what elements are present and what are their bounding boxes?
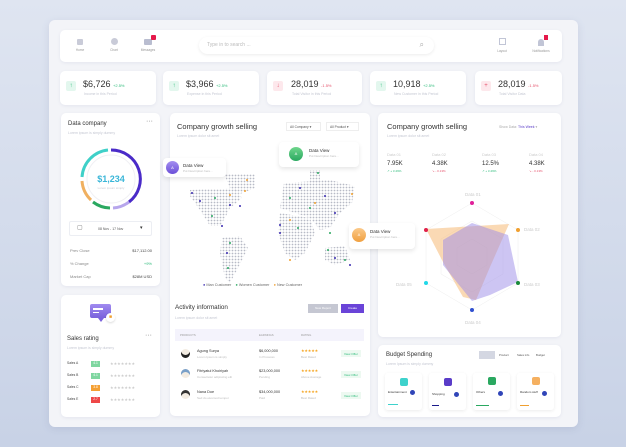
callout: data view orange: [349, 223, 415, 249]
rating rows: ★★★★★★★: [110, 397, 135, 402]
panel: map + activity: Company growth selling: [177, 122, 257, 131]
world dot map: [190, 170, 355, 283]
panel: budget spending: [378, 345, 561, 417]
panel: map + activity: [170, 113, 370, 416]
panel: data company: Lorem ipsum is simply dummy: [68, 131, 115, 135]
date picker: ▢: [77, 225, 83, 231]
panel: radar growth: ↘ - 0.13%: [529, 169, 543, 173]
panel: sales rating: Sales rating: [67, 336, 99, 342]
callout: data view A green: Data View: [309, 148, 329, 153]
tabs: Product: [499, 353, 509, 357]
text: Total Visitor Data: [499, 92, 525, 96]
callout: data view A green: Put Description here...: [309, 154, 339, 158]
table rows: View Offer: [344, 352, 358, 356]
text: +: [484, 83, 488, 89]
search box: Type in to search ...: [207, 42, 251, 48]
panel: sales rating: ···: [145, 332, 152, 339]
rating rows: Sales B: [67, 373, 78, 377]
header bar: [60, 30, 562, 62]
text: $3,966 +2.5%: [186, 79, 227, 89]
map legend: ● Man Customer ● Women Customer ● New Customer: [203, 283, 302, 287]
text: 10,918 +2.5%: [393, 79, 434, 89]
rating rows: Sales C: [67, 385, 79, 389]
tabs: Budget: [536, 353, 545, 357]
table rows: [181, 349, 361, 400]
date picker: 08 Nov - 17 Nov: [98, 227, 123, 231]
table rows: Nana Doe: [197, 390, 214, 394]
table rows: Best Rated: [301, 355, 316, 359]
container: [49, 20, 578, 427]
table header: PRODUCTS: [180, 333, 196, 337]
date picker: [69, 221, 152, 236]
search box: [199, 37, 434, 54]
panel: data company: Data company: [68, 121, 107, 127]
callout: data view A green: A: [295, 151, 297, 156]
panel: budget spending: Lorem Ipsum is simply dummy: [386, 362, 433, 366]
text: ↑: [172, 83, 176, 89]
panel: map + activity: Lorem ipsum dolor sit amet: [177, 134, 219, 138]
text: 28,019 -1.5%: [291, 79, 331, 89]
table rows: Best Rated: [301, 396, 316, 400]
text: Expense in this Period: [187, 92, 222, 96]
icon: home: [76, 39, 84, 52]
icon: messages: [141, 35, 156, 52]
stats list: Market Cap: [70, 274, 91, 279]
callout: data view orange: Put Description here...: [370, 235, 400, 239]
table rows: Lorem Ipsum is simply: [197, 355, 227, 359]
stat cards: $6,726 +2.5%: [83, 79, 124, 89]
callout: data view A purple: A: [171, 165, 174, 170]
radar chart: Data 02: [524, 227, 540, 232]
table rows: Paid: [259, 396, 265, 400]
rating rows: 3.8: [93, 385, 98, 389]
table rows: Sed do eiusmod tempor: [197, 396, 229, 400]
table rows: In Processs: [259, 355, 275, 359]
text: 28,019 -1.5%: [498, 79, 538, 89]
table rows: $23,000,000: [259, 369, 280, 373]
table rows: Fitriyatul Khoiriyah: [197, 369, 228, 373]
dropdowns: All Company ▾: [290, 125, 311, 129]
stats list: Prev Close: [70, 248, 90, 253]
panel: radar growth: Lorem ipsum dolor sit amet: [387, 134, 429, 138]
panel: map + activity: All Product ▾: [330, 125, 349, 129]
rating rows: ★★★★★★★: [110, 385, 135, 390]
rating rows: Sales E: [67, 397, 78, 401]
budget items: Entertainment: [388, 390, 407, 394]
text: ↓: [276, 83, 280, 89]
table header: RATING: [301, 333, 311, 337]
stats list: [70, 248, 152, 279]
table header: EARNINGS: [259, 333, 274, 337]
panel: radar growth: 4.38K: [432, 161, 448, 167]
stats list: $17,112.00: [132, 248, 152, 253]
table rows: $34,000,000: [259, 390, 280, 394]
text: New Customer in this Period: [394, 92, 438, 96]
icon: layout: Layout: [497, 49, 507, 53]
stat cards: ↑: [70, 83, 72, 89]
panel: radar growth: ↘ - 0.13%: [432, 169, 446, 173]
panel: radar growth: ↗ + 3.49%: [387, 169, 401, 173]
table rows: Above Average: [301, 375, 321, 379]
stats list: $28M USD: [132, 274, 152, 279]
callout: data view A purple: Put Description here...: [183, 169, 213, 173]
panel: sales rating: Lorem ipsum is simply dummy: [67, 346, 114, 350]
table rows: Consectetur adipiscing elit: [197, 375, 232, 379]
buttons: [308, 304, 338, 313]
panel: radar growth: Show Data: This Week ▾: [499, 125, 537, 129]
donut chart: Lorem ipsum simply: [98, 186, 125, 190]
budget items: [385, 373, 422, 410]
buttons: New Report: [315, 306, 331, 310]
rating rows: 4.1: [93, 373, 98, 377]
rating rows: ★★★★★★★: [110, 373, 135, 378]
table rows: ★★★★★: [301, 369, 318, 373]
icon: layout: [497, 38, 507, 53]
donut chart: $1,234: [97, 174, 125, 184]
tabs: Sales info: [517, 353, 529, 357]
table rows: Pending: [259, 375, 270, 379]
table rows: ★★★★★: [301, 390, 318, 394]
table rows: View Offer: [344, 394, 358, 398]
panel: radar growth: Data 04: [529, 152, 543, 157]
callout: data view A purple: Data View: [183, 163, 203, 168]
stats list: +9%: [144, 261, 152, 266]
panel: radar growth: ↗ + 3.49%: [482, 169, 496, 173]
icon: chart: Chart: [110, 48, 118, 52]
icon: messages: Messages: [141, 48, 155, 52]
panel: radar growth: Data 02: [432, 152, 446, 157]
text: ↑: [380, 83, 382, 89]
panel: radar growth: [378, 113, 561, 337]
stats list: % Change: [70, 261, 89, 266]
rating rows: Sales A: [67, 361, 78, 365]
text: Total Visitor in this Period: [292, 92, 331, 96]
callout: data view A purple: [163, 158, 226, 177]
panel: map + activity: Create: [348, 306, 357, 310]
stat cards: Income in this Period: [84, 92, 117, 96]
panel: radar growth: 7.95K: [387, 161, 403, 167]
radar chart: Data 03: [524, 282, 540, 287]
date picker: ▾: [140, 225, 143, 231]
rating rows: [67, 361, 135, 403]
stat cards: [60, 71, 156, 105]
dropdowns: [286, 122, 321, 131]
table header: [175, 329, 364, 341]
table rows: Agung Surya: [197, 349, 219, 353]
panel: budget spending: Others: [476, 390, 485, 394]
tabs: [479, 351, 545, 359]
panel: budget spending: Random stuff: [520, 390, 538, 394]
table rows: View Offer: [344, 372, 358, 376]
rating rows: ★★★★★★★: [110, 361, 135, 366]
icon: chat bubble: ■: [109, 314, 112, 320]
donut chart: [80, 148, 142, 210]
radar chart: [396, 192, 540, 325]
activity heading: Activity information: [175, 304, 228, 311]
panel: radar growth: Data 01: [387, 152, 401, 157]
rating rows: 4.1: [93, 361, 98, 365]
icon: chart: [110, 38, 118, 52]
panel: radar growth: Company growth selling: [387, 122, 467, 131]
data stats: [387, 152, 545, 173]
callout: data view A green: [279, 142, 359, 167]
icon: home: Home: [76, 48, 84, 52]
panel: budget spending: Shopping: [432, 392, 445, 396]
panel: data company: ···: [146, 118, 153, 125]
panel: radar growth: 4.38K: [529, 161, 545, 167]
panel: sales rating: [61, 295, 160, 417]
panel: radar growth: 12.5%: [482, 161, 499, 167]
radar chart: Data 04: [465, 320, 481, 325]
panel: radar growth: Data 03: [482, 152, 496, 157]
radar chart: Data 01: [465, 192, 481, 197]
callout: data view orange: A: [358, 232, 360, 237]
panel: map + activity: Lorem ipsum dolor sit amet: [175, 316, 217, 320]
icon: notifications: Notifications: [532, 49, 550, 53]
panel: data company: [61, 113, 160, 286]
table rows: $6,000,000: [259, 349, 278, 353]
search box: ⌕: [420, 40, 424, 49]
callout: data view orange: Data View: [370, 229, 390, 234]
radar chart: Data 05: [396, 282, 412, 287]
table rows: ★★★★★: [301, 349, 318, 353]
rating rows: 2.7: [93, 397, 98, 401]
panel: budget spending: Budget Spending: [386, 352, 432, 358]
